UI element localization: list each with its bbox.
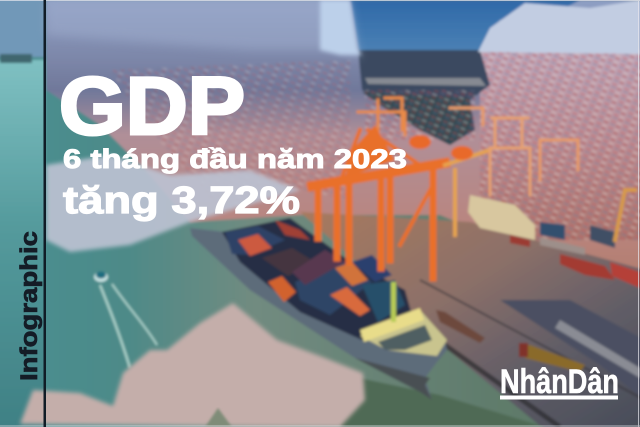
stacked trucks and containers on yard [560, 254, 615, 280]
sky patch [350, 0, 580, 50]
vertical rule [44, 0, 46, 427]
title: GDP: GDP [59, 61, 245, 152]
ship mast [391, 282, 396, 322]
headline: growth figure: tăng 3,72% [63, 180, 300, 222]
container stacks [222, 218, 412, 340]
subtitle: period: 6 tháng đầu năm 2023 [63, 144, 407, 174]
quay rails [420, 280, 640, 400]
top left shore [0, 0, 45, 57]
right container yard [480, 50, 640, 240]
ship bow deck [360, 310, 447, 356]
pale wash: top left [46, 0, 360, 60]
port yard [46, 0, 640, 300]
left container yard texture [110, 60, 350, 210]
small boat and wake [94, 272, 157, 368]
pale wash: upper right of title [320, 0, 362, 55]
quay road [300, 212, 640, 427]
pale wash: under title [46, 155, 300, 252]
pale wash: bottom patch [20, 303, 365, 427]
side label: Infographic: Infographic [16, 231, 43, 381]
ship hull [190, 228, 447, 400]
barge on quay [436, 310, 485, 343]
orange gantry cranes [312, 98, 635, 278]
dark yard patch [358, 50, 490, 145]
top right clouds [478, 0, 640, 54]
lower green water [340, 375, 545, 427]
left water column [0, 60, 45, 427]
